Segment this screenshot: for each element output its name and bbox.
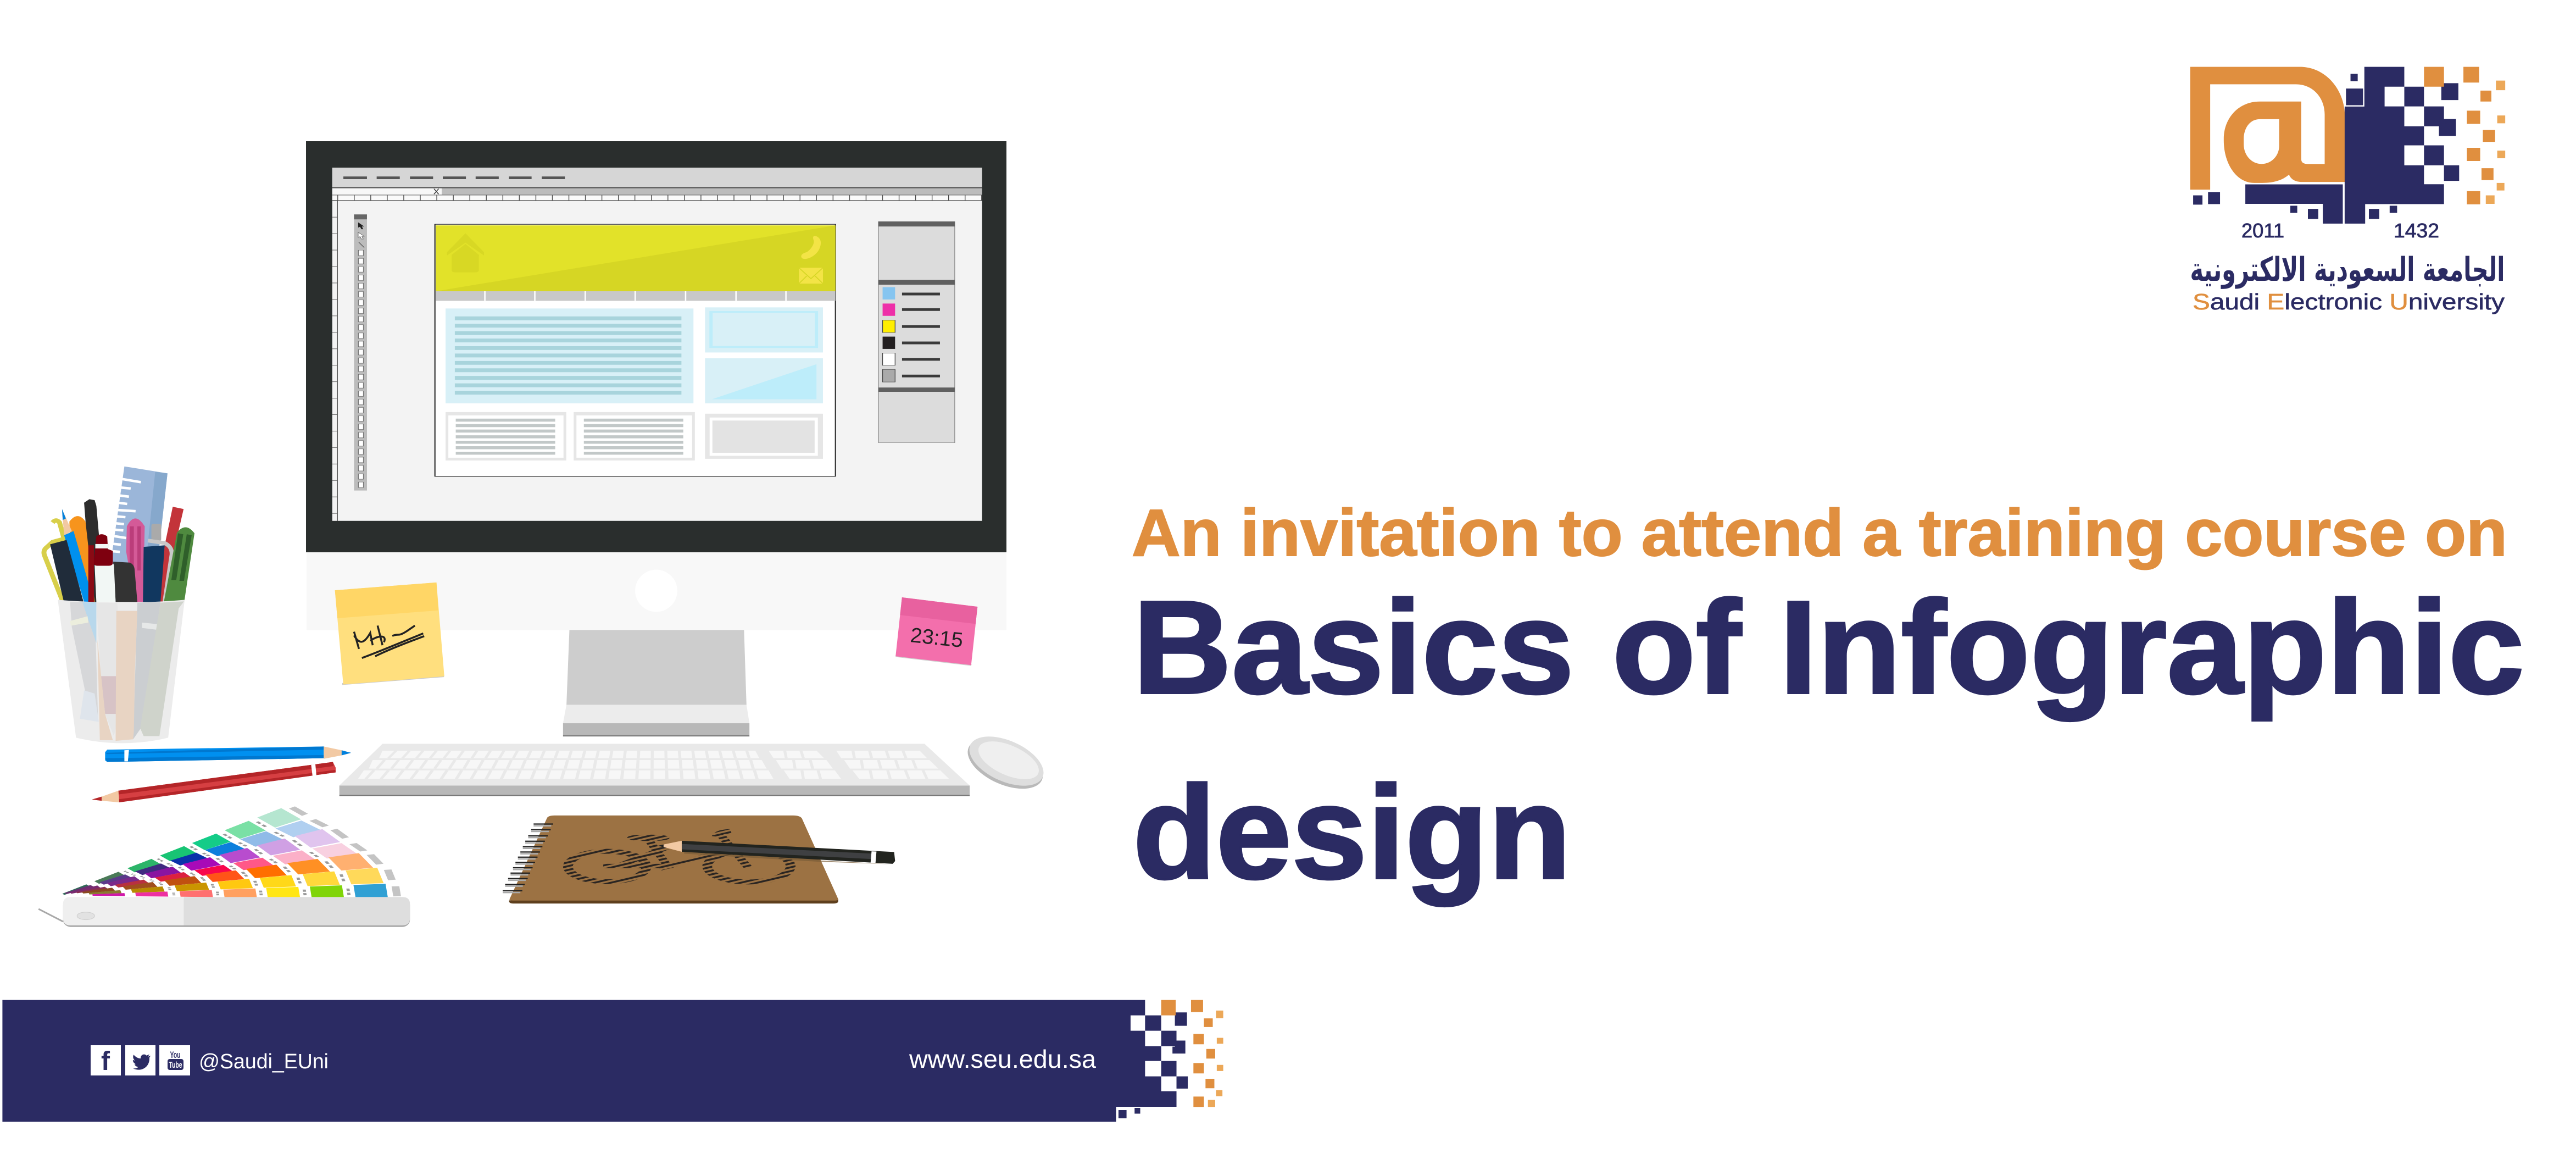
web page mockup: [435, 224, 836, 476]
green marker: [164, 527, 194, 601]
small text card two: [574, 412, 695, 461]
icon: twitter: [125, 1045, 155, 1075]
icon: home: [447, 234, 484, 273]
bicycle drawing: [568, 831, 791, 882]
fan blade: mixed brights: [92, 884, 401, 897]
notebook spiral: [503, 824, 553, 892]
icon: facebook: f: [101, 1047, 110, 1076]
fan blade: oranges: [82, 853, 383, 894]
fan blade: purples: [70, 829, 349, 894]
monitor frame: [306, 141, 1006, 552]
blue pencil: [105, 746, 351, 762]
orange pen: [69, 516, 94, 602]
navy pen: [143, 524, 172, 602]
twitter handle: @Saudi_EUni: [199, 1050, 329, 1073]
fan holder: [38, 897, 410, 927]
notebook: [503, 816, 895, 903]
loose pencils: [92, 746, 351, 802]
glass cup: [58, 600, 185, 743]
logo years: 1432: [2394, 219, 2439, 242]
icon: envelope: [799, 268, 823, 284]
footer banner: [2, 1000, 1223, 1122]
notebook pencil: [658, 841, 895, 864]
menu bar: [332, 168, 982, 195]
icon: youtube: Tube: [169, 1061, 182, 1070]
logo years: 2011: [2241, 219, 2284, 242]
logo mark: @ and pixel squares: [2190, 67, 2505, 224]
red pen: [159, 507, 183, 602]
dark marker: [113, 562, 137, 602]
screen content: [332, 168, 982, 521]
navigation bar: [436, 291, 836, 301]
sticky note time: 23:15: [909, 624, 964, 652]
rulers: [332, 195, 982, 521]
colour swatch fan: [38, 805, 410, 927]
monitor chin and stand: [307, 552, 1006, 736]
sticky note: pink: [895, 597, 977, 666]
colour palette panel: [878, 221, 955, 443]
icon: phone: [801, 236, 821, 259]
main title line two: design: [1133, 759, 1571, 907]
subtitle: An invitation to attend a training course on: [1132, 495, 2507, 570]
logo years: [2241, 219, 2439, 242]
sticky note: yellow: [335, 583, 444, 685]
icon: facebook: [91, 1045, 121, 1076]
red pencil: [92, 762, 336, 802]
pen cup: [44, 467, 194, 743]
university logo: [2190, 67, 2505, 314]
small text card one: [446, 412, 566, 461]
pink marker: [126, 518, 144, 602]
white marker: [88, 534, 115, 602]
fan blade: greens: [63, 807, 308, 895]
clip pencil: [44, 520, 64, 601]
image box two: [705, 358, 823, 403]
fan blade: yellows: [89, 867, 396, 895]
keyboard: [340, 744, 970, 796]
monitor illustration: [306, 141, 1006, 736]
dark pen: [50, 540, 84, 601]
grey image card: [705, 414, 823, 459]
icon: youtube: You: [170, 1050, 180, 1060]
yellow header: [436, 225, 836, 291]
main title line one: Basics of Infographic: [1133, 574, 2524, 722]
mouse: [960, 727, 1051, 799]
ruler: [105, 467, 168, 602]
black pen: [84, 499, 102, 602]
main text block: [446, 308, 693, 403]
website url: www.seu.edu.sa: [909, 1045, 1096, 1073]
fan blade: pinks: [76, 843, 367, 894]
icon: youtube: [159, 1045, 190, 1075]
tool palette: [354, 214, 367, 491]
logo english name: Saudi Electronic University: [2193, 289, 2505, 314]
blue pencil: [62, 509, 94, 602]
fan blade: blues: [65, 819, 329, 894]
image box one: [705, 307, 823, 352]
banner background with pixel edge: [2, 1000, 1223, 1122]
